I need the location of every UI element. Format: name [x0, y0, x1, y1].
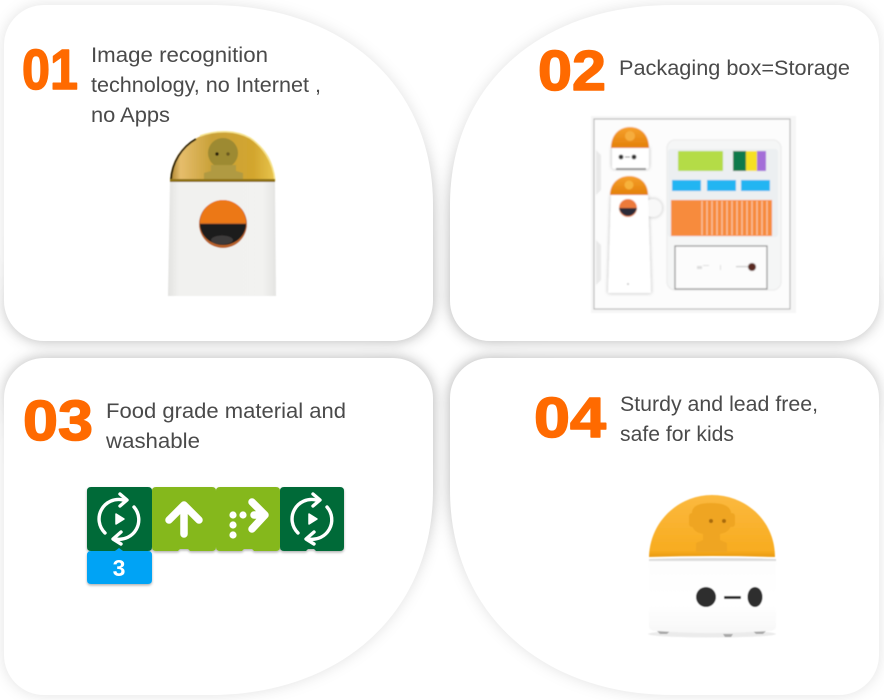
- number 03: 03: [23, 389, 93, 453]
- block: arrow up: [152, 487, 216, 551]
- text: image recognition description: no Apps: [91, 103, 170, 127]
- panel: sturdy and lead free: [450, 358, 879, 695]
- text: packaging description: Packaging box=Storage: [619, 56, 850, 80]
- coding blocks row: [87, 487, 344, 584]
- block: loop end: [280, 487, 344, 551]
- block: dotted arrow right: [216, 487, 280, 551]
- panel: packaging box: [450, 5, 879, 341]
- image: small robot with orange dome: [648, 495, 776, 638]
- image: robot with camera eye: [168, 132, 276, 296]
- panel: food grade material: [4, 358, 433, 695]
- number 02: 02: [538, 39, 606, 103]
- block: loop start: [87, 487, 152, 551]
- block: repeat count 3: [87, 547, 152, 584]
- number 01: 01: [22, 38, 78, 102]
- text: sturdy description: Sturdy and lead free,: [620, 392, 818, 416]
- text: food grade description: washable: [105, 429, 200, 453]
- panel: image recognition: [4, 5, 433, 341]
- image: open storage box with contents: [591, 116, 796, 313]
- text: food grade description: Food grade material and: [106, 399, 346, 423]
- text: image recognition description: technology, no Internet ,: [91, 73, 321, 97]
- text: image recognition description: Image recognition: [91, 43, 268, 67]
- number 04: 04: [534, 386, 606, 450]
- block: repeat count 3: 3: [113, 555, 125, 581]
- text: sturdy description: safe for kids: [620, 422, 734, 446]
